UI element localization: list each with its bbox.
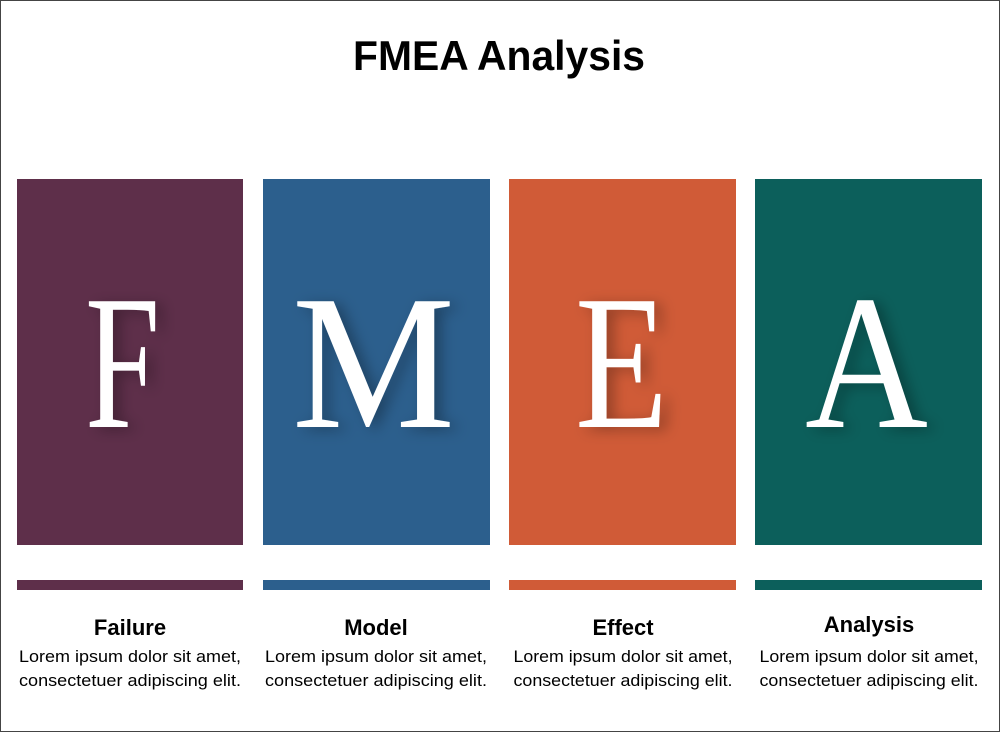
letter A: A	[805, 256, 928, 469]
panel: E	[509, 179, 736, 545]
letter E: E	[575, 256, 668, 469]
caption: effect: Lorem ipsum dolor sit amet,	[514, 648, 732, 666]
bar: analysis	[755, 580, 982, 590]
caption: failure: Lorem ipsum dolor sit amet,	[19, 648, 241, 666]
caption: effect: consectetuer adipiscing elit.	[514, 672, 732, 690]
caption: effect: Effect	[592, 615, 654, 640]
bar: model	[263, 580, 490, 590]
caption: analysis: Lorem ipsum dolor sit amet,	[760, 648, 978, 666]
letter M: M	[292, 256, 455, 469]
caption: failure: Failure	[94, 615, 166, 640]
caption: failure: consectetuer adipiscing elit.	[19, 672, 241, 690]
title: FMEA Analysis	[353, 32, 645, 79]
letter F: F	[85, 256, 160, 469]
caption: analysis: Analysis	[824, 612, 914, 637]
panel: F	[17, 179, 243, 545]
panel: M	[263, 179, 490, 545]
caption: failure	[19, 615, 241, 690]
caption: effect	[514, 615, 732, 690]
panel: A	[755, 179, 982, 545]
bar: failure	[17, 580, 243, 590]
caption: model: Lorem ipsum dolor sit amet,	[265, 648, 487, 666]
caption: model	[265, 615, 487, 690]
caption: model: Model	[344, 615, 408, 640]
bar: effect	[509, 580, 736, 590]
caption: analysis: consectetuer adipiscing elit.	[760, 672, 978, 690]
caption: analysis	[760, 612, 978, 690]
caption: model: consectetuer adipiscing elit.	[265, 672, 487, 690]
